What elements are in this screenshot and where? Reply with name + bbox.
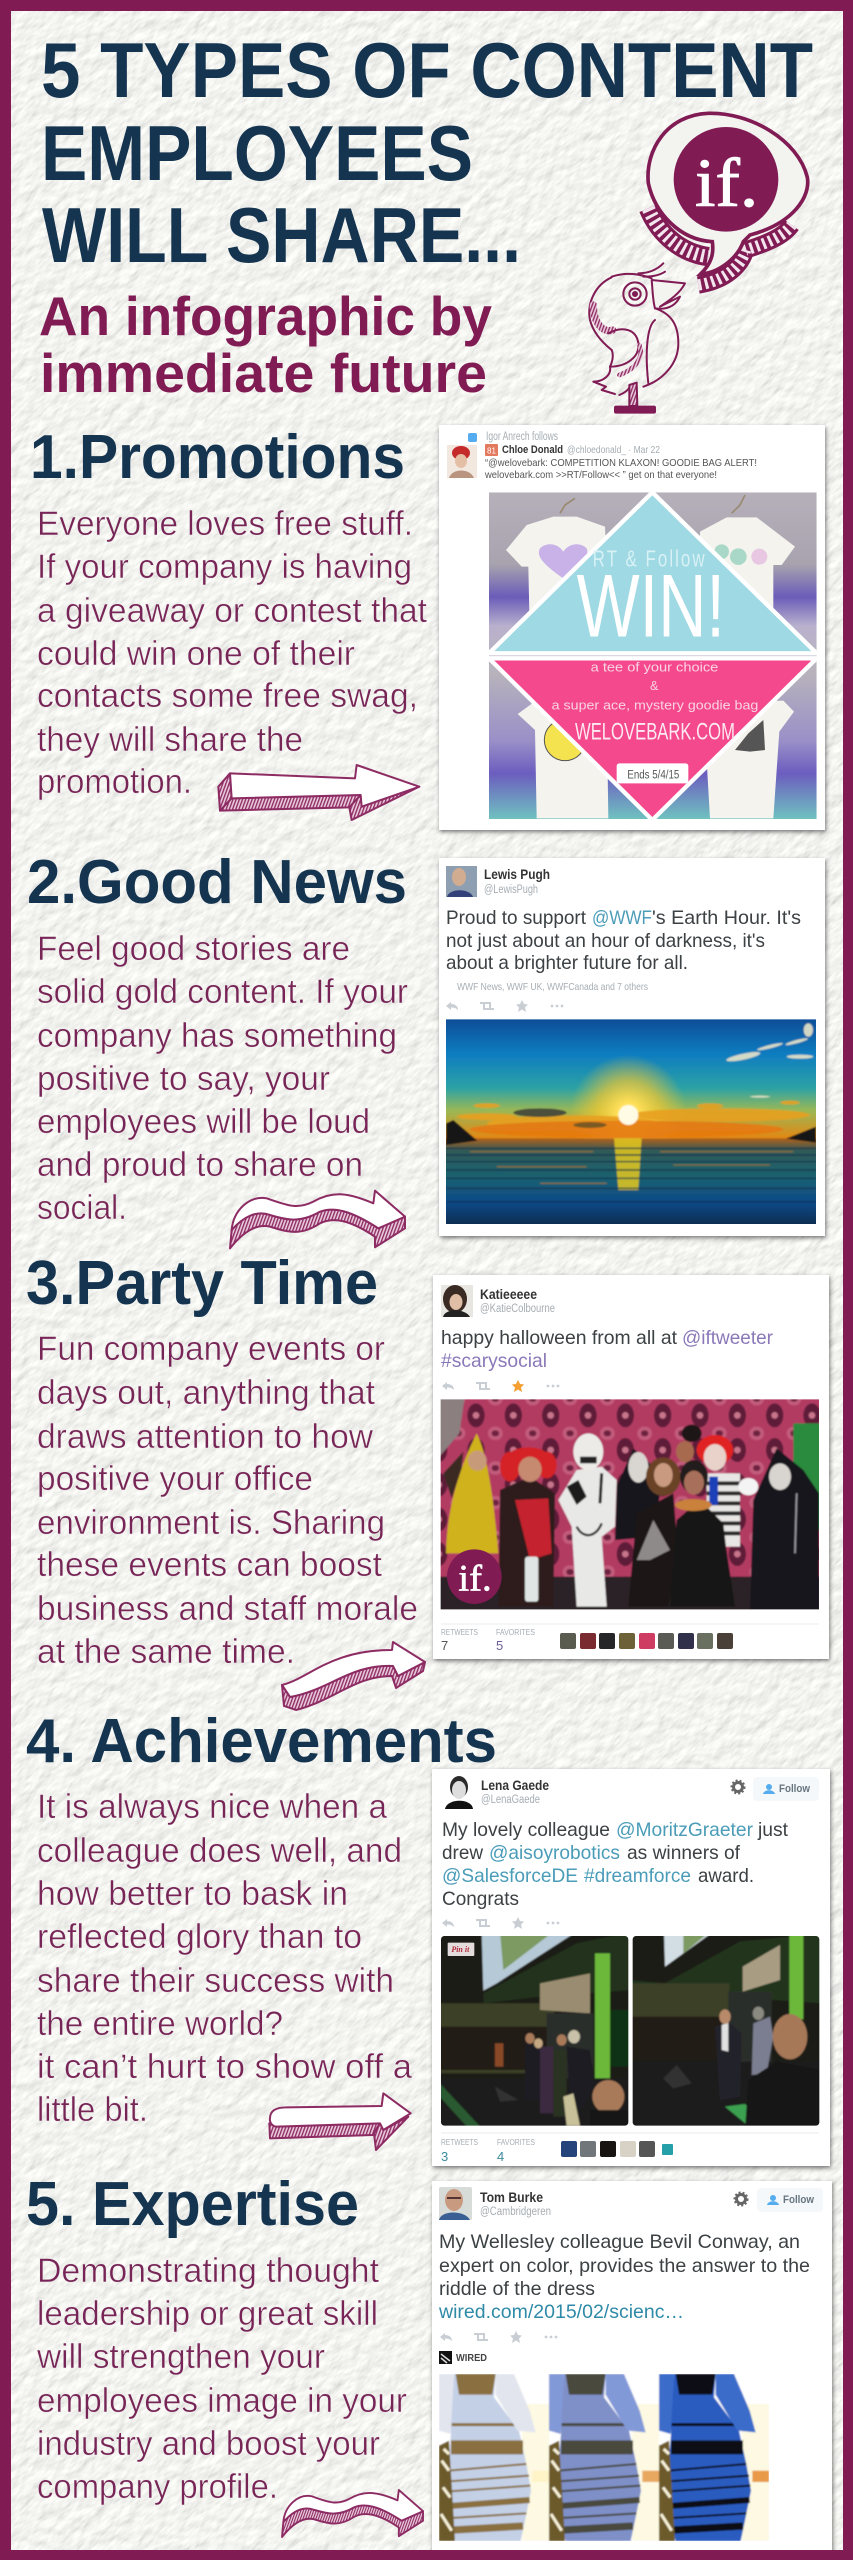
tweet context line: Igor Anrech follows	[486, 431, 558, 443]
favourite avatars	[561, 2141, 673, 2157]
tweet actions	[442, 1380, 559, 1392]
tweet handle and date: @chloedonald_ · Mar 22	[567, 445, 660, 456]
tweet handle: @KatieColbourne	[480, 1303, 555, 1315]
tweet author: Tom Burke	[480, 2189, 543, 2205]
icon: gear	[732, 1780, 744, 1794]
text block: reflected glory than to	[37, 1918, 362, 1956]
person: front woman	[670, 1460, 735, 1607]
text block: If your company is having	[37, 548, 412, 586]
follow button: Follow	[783, 2194, 814, 2206]
pinterest badge	[448, 1943, 474, 1956]
person: clown	[697, 1435, 758, 1547]
tweet stats: RETWEETS	[441, 2138, 478, 2147]
promo image: a super ace, mystery goodie bag	[552, 698, 758, 712]
promo image: a tee of your choice	[591, 661, 718, 675]
text block: how better to bask in	[37, 1875, 348, 1913]
arrow	[269, 2093, 411, 2150]
text block: and proud to share on	[37, 1146, 363, 1184]
promo image: WELOVEBARK.COM	[575, 718, 735, 745]
bottle	[525, 1557, 538, 1602]
heading: 1.Promotions	[30, 423, 405, 492]
tweet author: Chloe Donald	[502, 444, 563, 456]
tweet text: Congrats	[442, 1888, 519, 1910]
text block: social.	[37, 1189, 127, 1227]
tweet stats: 4	[497, 2149, 504, 2164]
text block: will strengthen your	[36, 2338, 325, 2376]
icon: if logo	[447, 1549, 502, 1604]
favourite avatars	[560, 1633, 733, 1649]
wired source: WIRED	[456, 2353, 487, 2364]
promo image	[489, 492, 817, 820]
tweet card	[439, 425, 825, 830]
tweet author: Lena Gaede	[481, 1777, 549, 1793]
icon: if speech bubble	[648, 113, 808, 285]
tweet text: @SalesforceDE	[442, 1865, 578, 1887]
text block	[36, 2252, 407, 2506]
text block: It is always nice when a	[37, 1788, 387, 1826]
person: devil	[498, 1447, 557, 1607]
arrow	[282, 2490, 423, 2537]
tweet text	[438, 2231, 810, 2323]
text block: little bit.	[37, 2091, 148, 2129]
tweet stats	[441, 1624, 819, 1653]
text block: promotion.	[37, 763, 192, 801]
tweet text: as winners of	[627, 1842, 741, 1864]
tweet stats: 3	[441, 2149, 448, 2164]
title	[41, 26, 813, 279]
tweet actions	[440, 2331, 557, 2343]
header	[39, 26, 813, 413]
text block: these events can boost	[37, 1546, 383, 1584]
badge	[485, 444, 498, 456]
tweet text	[442, 1819, 789, 1910]
text block: they will share the	[37, 721, 303, 759]
person: scream mask	[750, 1448, 819, 1609]
tweet text: just	[757, 1819, 789, 1841]
tweet handle: @LenaGaede	[481, 1794, 540, 1806]
tweet card	[432, 2181, 832, 2553]
text block: business and staff morale	[37, 1590, 418, 1628]
tweet actions	[446, 1000, 563, 1012]
tweet text: 's Earth Hour. It's	[652, 907, 801, 929]
arrow	[230, 1191, 405, 1248]
tweet text: expert on color, provides the answer to the	[439, 2255, 810, 2277]
arrow	[282, 1642, 425, 1710]
heading: 4. Achievements	[26, 1707, 497, 1776]
panel: good news	[27, 848, 825, 1248]
avatar	[445, 1776, 473, 1809]
tweet contributors: WWF News, WWF UK, WWFCanada and 7 others	[457, 981, 648, 993]
follow button	[757, 2188, 823, 2212]
heading: 5. Expertise	[26, 2170, 359, 2239]
text block: contacts some free swag,	[37, 677, 418, 715]
text block: environment is. Sharing	[37, 1504, 385, 1542]
panel: party time	[26, 1249, 829, 1710]
icon: if logo: if.	[458, 1558, 492, 1599]
sunrise photo	[443, 1017, 819, 1227]
icon: bird	[589, 263, 685, 413]
icon: gear	[734, 2192, 748, 2206]
tweet text: @iftweeter	[682, 1327, 773, 1349]
tweet text: happy halloween from all at	[441, 1327, 678, 1349]
tweet text: #dreamforce	[584, 1865, 691, 1887]
text block: days out, anything that	[37, 1374, 376, 1412]
text block: company profile.	[37, 2468, 278, 2506]
tweet text: award.	[698, 1865, 754, 1887]
tweet text: about a brighter future for all.	[446, 952, 688, 974]
panel: expertise	[26, 2170, 832, 2553]
tweet author: Katieeeee	[480, 1286, 537, 1302]
heading: 2.Good News	[27, 848, 407, 917]
tweet text: “@welovebark: COMPETITION KLAXON! GOODIE BAG ALERT!	[485, 457, 757, 469]
tweet text: @aisoyrobotics	[489, 1842, 620, 1864]
dress: blue and black	[659, 2374, 769, 2541]
tweet stats: RETWEETS	[441, 1628, 478, 1637]
tweet text: welovebark.com >>RT/Follow<< ” get on that everyone!	[484, 469, 717, 481]
tweet text: #scarysocial	[441, 1350, 547, 1372]
t-shirts	[506, 517, 795, 818]
text block: it can’t hurt to show off a	[37, 2048, 412, 2086]
text block	[37, 1788, 412, 2129]
dress photos	[439, 2374, 769, 2541]
text block: Demonstrating thought	[37, 2252, 380, 2290]
text block: could win one of their	[37, 635, 355, 673]
subtitle: An infographic by	[39, 285, 492, 347]
tweet text: wired.com/2015/02/scienc…	[438, 2301, 684, 2323]
dress: mid tone	[549, 2374, 659, 2541]
person: hooded mask	[615, 1448, 660, 1540]
text block: draws attention to how	[37, 1418, 373, 1456]
tweet text	[441, 1327, 773, 1372]
text block: at the same time.	[37, 1633, 295, 1671]
tweet actions	[442, 1917, 559, 1929]
subtitle	[39, 285, 492, 404]
tweet handle: @LewisPugh	[484, 884, 538, 896]
stage photo right	[628, 1932, 823, 2130]
promo image: WIN!	[577, 556, 725, 656]
tweet handle: @Cambridgeren	[480, 2206, 551, 2218]
text block: positive to say, your	[37, 1060, 330, 1098]
text block: Everyone loves free stuff.	[37, 505, 413, 543]
person: banana	[443, 1433, 498, 1553]
text block: company has something	[37, 1017, 397, 1055]
person: women	[628, 1425, 702, 1607]
title: EMPLOYEES	[41, 109, 473, 197]
subtitle: immediate future	[40, 342, 487, 404]
party photo	[437, 1395, 823, 1613]
tweet card	[432, 1769, 830, 2166]
wired source	[439, 2351, 487, 2364]
tweet stats: 7	[441, 1638, 448, 1653]
text block: colleague does well, and	[37, 1832, 402, 1870]
tweet text: drew	[442, 1842, 484, 1864]
title: WILL SHARE...	[42, 191, 521, 279]
avatar	[441, 1285, 473, 1317]
arrow	[218, 765, 419, 820]
panel: achievements	[26, 1707, 830, 2166]
stage photo left	[437, 1932, 633, 2130]
person: stormtrooper	[558, 1433, 617, 1607]
text block: employees will be loud	[37, 1103, 370, 1141]
tweet stats: FAVORITES	[496, 1628, 535, 1637]
text block	[37, 930, 408, 1227]
triangles	[489, 492, 817, 653]
tweet text	[446, 907, 801, 974]
text block: positive your office	[37, 1460, 313, 1498]
avatar	[446, 866, 477, 897]
tweet text: not just about an hour of darkness, it's	[446, 930, 765, 952]
avatar	[447, 445, 477, 478]
text block: Fun company events or	[37, 1330, 385, 1368]
tweet stats	[441, 2133, 819, 2164]
tweet text	[484, 457, 757, 481]
panel: promotions	[30, 423, 825, 830]
badge: 81	[487, 446, 496, 456]
promo image: RT & Follow	[593, 546, 707, 572]
text block: industry and boost your	[37, 2425, 380, 2463]
dress: white and gold	[439, 2374, 549, 2541]
pinterest badge: Pin it	[451, 1945, 470, 1954]
icon: if speech bubble: if.	[695, 145, 758, 221]
tweet text: @WWF	[592, 907, 652, 929]
text block: leadership or great skill	[37, 2295, 378, 2333]
tweet card	[439, 858, 825, 1236]
promo image: &	[650, 679, 659, 693]
icon: follow badge	[468, 433, 477, 442]
text block: a giveaway or contest that	[37, 592, 428, 630]
text block: solid gold content. If your	[37, 973, 408, 1011]
text block	[37, 1330, 418, 1671]
tweet stats: 5	[496, 1638, 503, 1653]
follow button: Follow	[779, 1783, 810, 1795]
text block: the entire world?	[37, 2005, 283, 2043]
avatar	[439, 2187, 472, 2220]
promo image: Ends 5/4/15	[627, 767, 680, 781]
text block: employees image in your	[37, 2382, 407, 2420]
tweet author: Lewis Pugh	[484, 866, 550, 882]
tweet text: Proud to support	[446, 907, 587, 929]
tweet text: My lovely colleague	[442, 1819, 610, 1841]
tweet stats: FAVORITES	[497, 2138, 535, 2147]
text block: Feel good stories are	[37, 930, 350, 968]
text block	[37, 505, 428, 801]
tweet text: @MoritzGraeter	[616, 1819, 753, 1841]
follow button	[753, 1777, 819, 1801]
tweet card	[433, 1275, 829, 1659]
heading: 3.Party Time	[26, 1249, 378, 1318]
text block: share their success with	[37, 1962, 394, 2000]
tweet text: My Wellesley colleague Bevil Conway, an	[439, 2231, 800, 2253]
tweet text: riddle of the dress	[439, 2278, 595, 2300]
